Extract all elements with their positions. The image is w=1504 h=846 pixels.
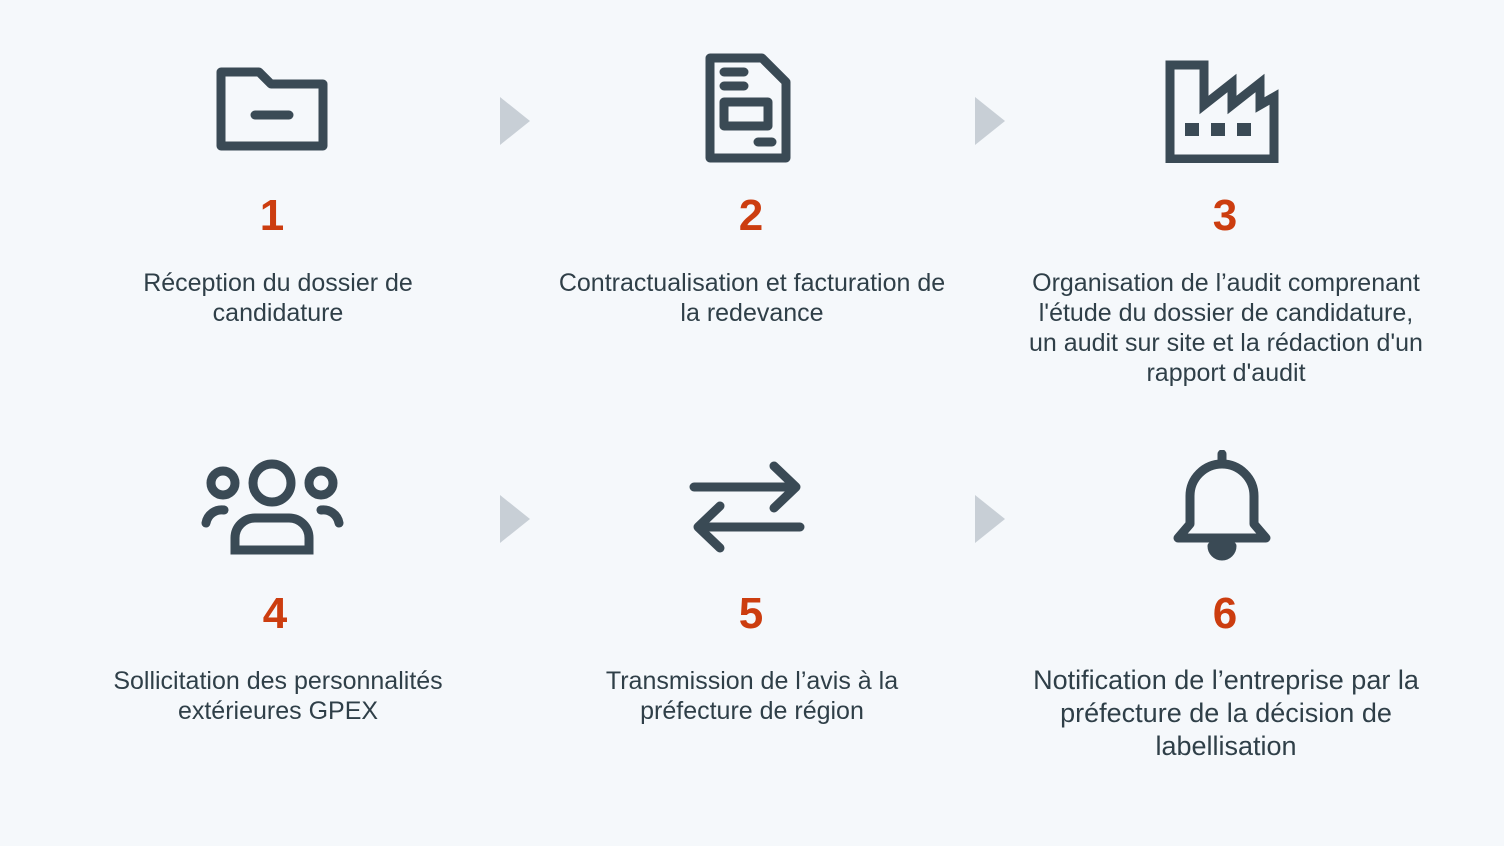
step 3 [1029, 191, 1423, 387]
arrow 4 [975, 495, 1005, 543]
text 1: candidature [213, 299, 343, 327]
text 3: rapport d'audit [1146, 359, 1306, 387]
text 2: la redevance [680, 299, 824, 327]
number 1: 1 [260, 191, 284, 240]
text 4: extérieures GPEX [178, 697, 378, 725]
number 4: 4 [263, 589, 287, 638]
arrow 2 [975, 97, 1005, 145]
icon: bell [1174, 450, 1270, 560]
icon: exchange arrows [690, 462, 804, 552]
text 1: Réception du dossier de [143, 269, 413, 297]
text 4 [113, 667, 443, 725]
text 1 [143, 269, 413, 327]
icon: folder [216, 68, 328, 150]
text 2 [559, 269, 945, 327]
text 6: Notification de l’entreprise par la [1033, 665, 1419, 695]
text 3 [1029, 269, 1423, 387]
text 3: Organisation de l’audit comprenant [1032, 269, 1420, 297]
step 5 [606, 589, 898, 725]
text 5: Transmission de l’avis à la [606, 667, 898, 695]
number 6: 6 [1213, 589, 1237, 638]
text 5 [606, 667, 898, 725]
arrow 1 [500, 97, 530, 145]
text 6 [1033, 665, 1419, 761]
icon: people [202, 460, 344, 554]
number 3: 3 [1213, 191, 1237, 240]
text 2: Contractualisation et facturation de [559, 269, 945, 297]
text 3: un audit sur site et la rédaction d'un [1029, 329, 1423, 357]
text 6: préfecture de la décision de [1060, 698, 1392, 728]
text 4: Sollicitation des personnalités [113, 667, 443, 695]
text 6: labellisation [1155, 731, 1297, 761]
step 4 [113, 589, 443, 725]
number 2: 2 [739, 191, 763, 240]
step 2 [559, 191, 945, 327]
text 5: préfecture de région [640, 697, 864, 725]
arrow 3 [500, 495, 530, 543]
text 3: l'étude du dossier de candidature, [1039, 299, 1413, 327]
step 6 [1033, 589, 1419, 761]
icon: factory [1166, 60, 1278, 163]
step 1 [143, 191, 413, 327]
icon: document [706, 54, 790, 162]
number 5: 5 [739, 589, 763, 638]
